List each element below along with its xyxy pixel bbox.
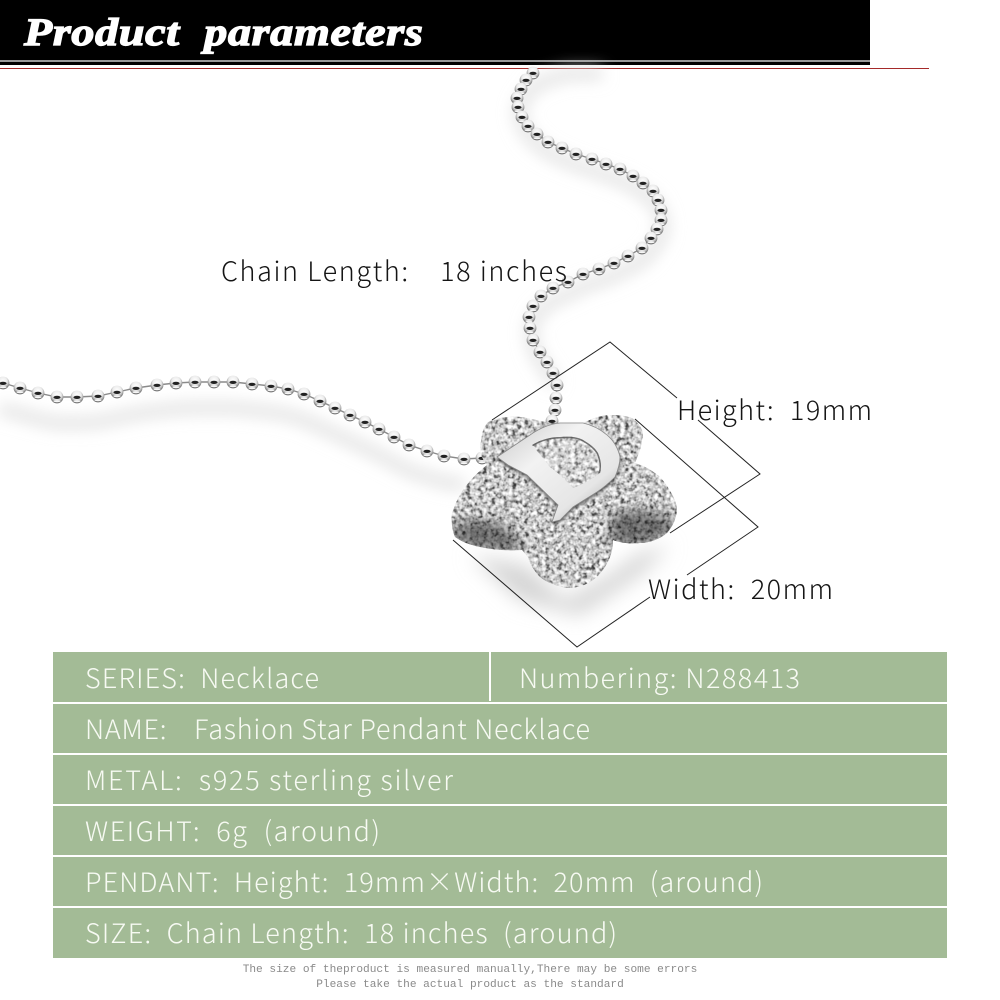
dimension lines: width — [453, 419, 758, 647]
chain: upper strand — [517, 73, 661, 421]
header band — [0, 0, 870, 65]
chain shadows — [0, 74, 663, 485]
dimension lines: height — [492, 342, 760, 533]
row: pendant: PENDANT: Height: 19mm×Width: 20mm (around) — [85, 861, 763, 900]
D counter — [532, 436, 601, 488]
letter D — [497, 423, 620, 524]
row: pendant — [53, 857, 947, 906]
lift overlay — [452, 415, 677, 588]
necklace illustration — [0, 56, 761, 648]
chain length label: Chain Length: 18 inches — [221, 250, 567, 289]
dimpled texture — [452, 415, 677, 588]
row: name — [53, 704, 947, 753]
row: name: NAME: Fashion Star Pendant Necklace — [85, 708, 590, 747]
row: series and numbering — [53, 652, 947, 702]
row: size: SIZE: Chain Length: 18 inches (around) — [85, 912, 617, 951]
row: weight: WEIGHT: 6g (around) — [85, 810, 380, 849]
row: series and numbering: Numbering: N288413 — [519, 657, 800, 696]
pendant shadow — [470, 545, 670, 615]
chain: left strand — [3, 382, 482, 459]
dark lower shading — [450, 510, 678, 551]
dimension labels — [221, 250, 872, 632]
width label: Width: 20mm — [648, 568, 833, 607]
parameters table — [53, 349, 947, 958]
row: series and numbering: SERIES: Necklace — [85, 657, 319, 696]
row: weight — [53, 806, 947, 855]
D shadow — [497, 425, 620, 524]
footnote: The size of theproduct is measured manually,There may be some errors Please take the actual product as the standard — [243, 964, 697, 990]
row: metal: METAL: s925 sterling silver — [85, 759, 453, 798]
red rule — [0, 68, 929, 69]
D face — [497, 423, 620, 522]
title: Product parameters — [24, 11, 424, 54]
row: size — [53, 908, 947, 958]
row: metal — [53, 755, 947, 804]
height label: Height: 19mm — [677, 389, 872, 428]
star pendant — [452, 415, 677, 588]
